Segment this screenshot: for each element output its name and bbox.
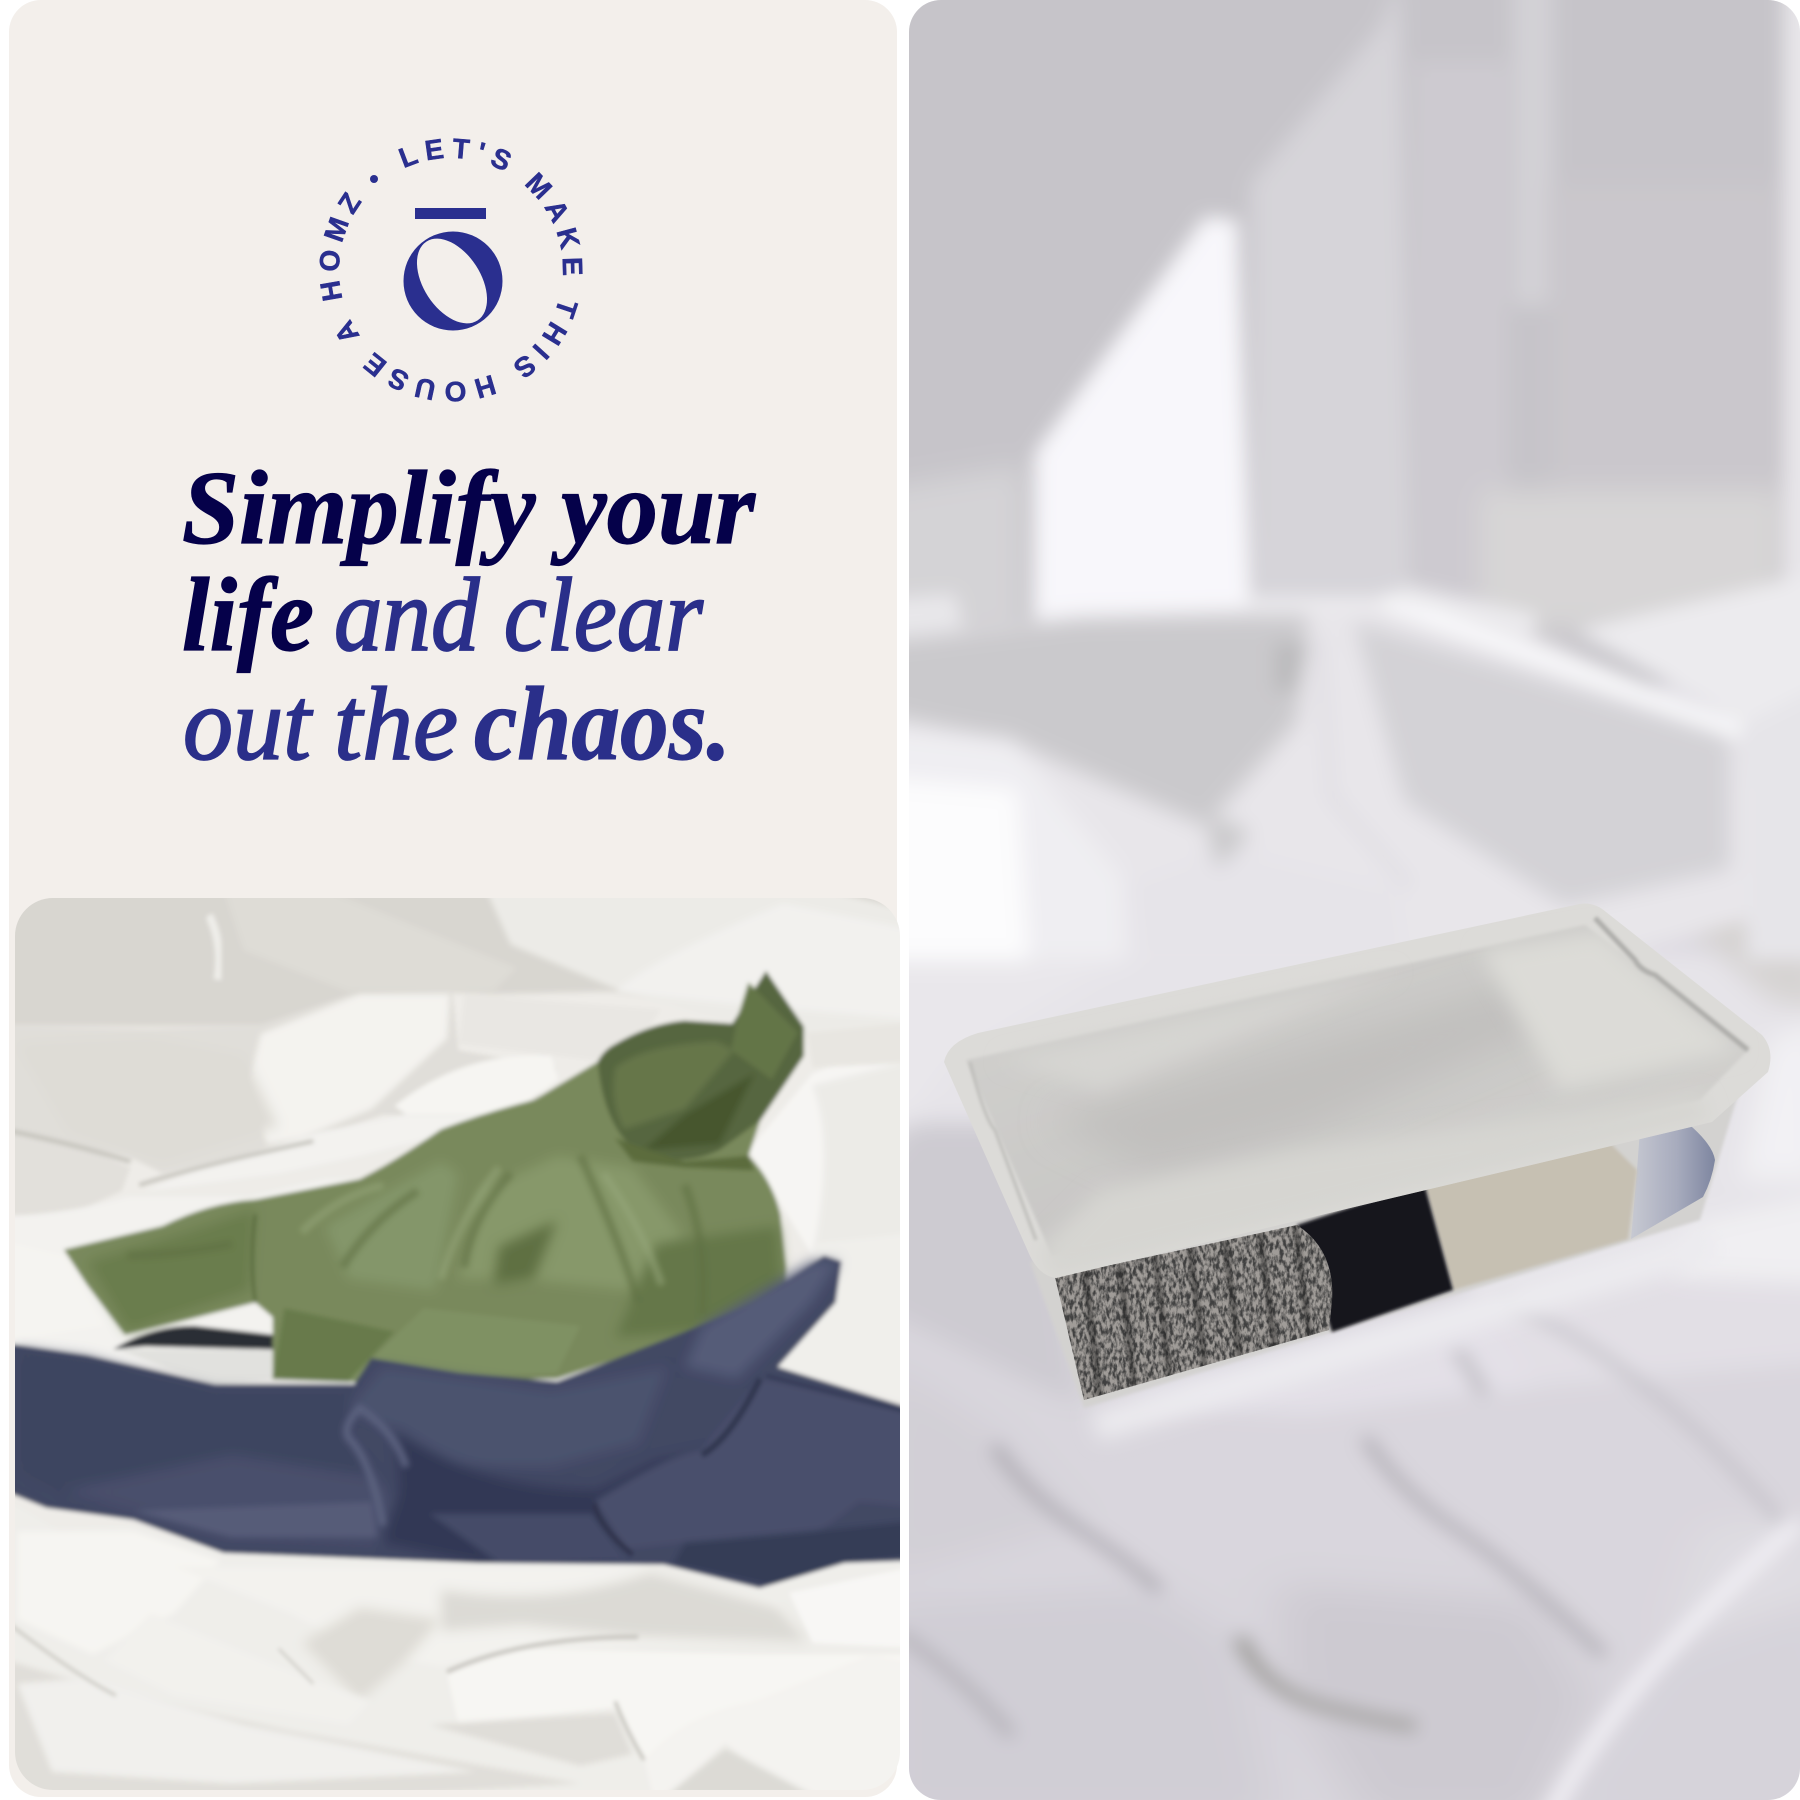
heading: Simplify your life and clear out the chaos: and clear — [334, 556, 704, 673]
logo macron bar — [415, 208, 486, 219]
back-right pillow — [1582, 580, 1800, 720]
storage box — [944, 904, 1770, 1440]
clothes: black garment — [1297, 1183, 1453, 1332]
navy trousers — [0, 1255, 928, 1588]
duvet foreground — [15, 1534, 900, 1790]
heading: Simplify your life and clear out the chaos: chaos. — [474, 665, 731, 782]
clothes: grey knit — [1055, 1225, 1332, 1400]
logo dot — [370, 175, 378, 183]
heading: Simplify your life and clear out the chaos: the — [334, 665, 458, 782]
wall — [875, 0, 1800, 685]
mid-bed tones beside the box — [880, 870, 1800, 1180]
photo: messy bed with clothes — [0, 868, 928, 1800]
green shirt — [64, 971, 804, 1382]
box body — [1080, 1100, 1738, 1406]
heading: Simplify your life and clear out the chaos: out — [183, 665, 314, 782]
panel: headline and logo card — [9, 0, 897, 1797]
front pillow — [875, 594, 1800, 960]
heading: Simplify your life and clear out the chaos — [182, 449, 756, 782]
pillows — [875, 569, 1800, 960]
clothes: beige sweater — [1424, 1135, 1637, 1290]
clothes: blue garment — [1631, 1127, 1715, 1239]
logo: circular badge — [320, 138, 583, 402]
box lid — [944, 904, 1770, 1280]
logo letter o — [402, 226, 502, 336]
heading: Simplify your life and clear out the chaos: Simplify your — [182, 449, 756, 566]
logo circular text: LET'S MAKE THIS HOUSE A HOMZ — [320, 138, 583, 402]
soft halo under box — [1094, 1252, 1669, 1438]
duvet — [875, 955, 1800, 1800]
photo: tidy bed with storage box — [875, 0, 1800, 1800]
bed sheet middle — [15, 1068, 862, 1384]
heading: Simplify your life and clear out the chaos: life — [182, 556, 314, 673]
pillows at the back — [15, 898, 884, 1214]
dark strap — [113, 1326, 273, 1349]
